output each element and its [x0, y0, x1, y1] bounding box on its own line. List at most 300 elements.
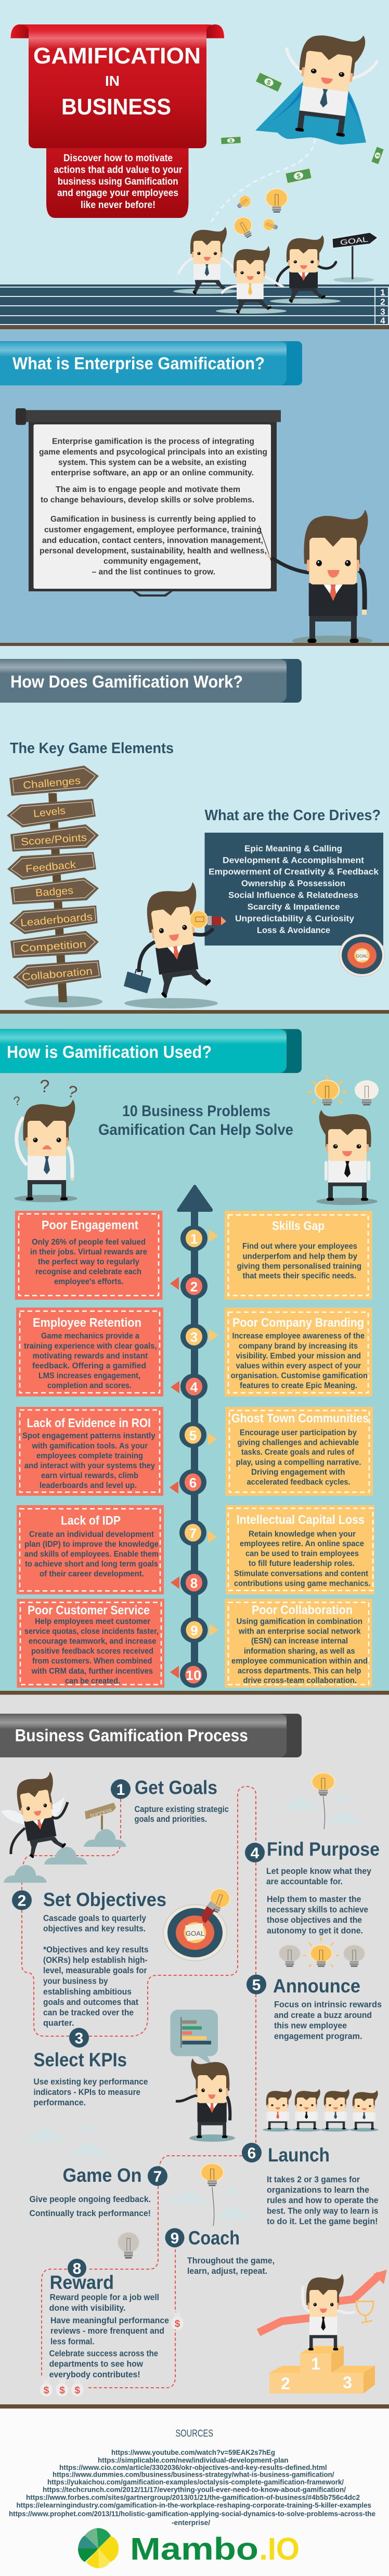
step 5: announce: 5	[252, 1977, 261, 1994]
step 9: coach: Throughout the game,	[187, 2256, 275, 2266]
logo mark	[78, 2528, 119, 2568]
step 3: select kpis: performance.	[33, 2098, 86, 2107]
source list: https://www.youtube.com/watch?v=59EAK2s7hEg	[111, 2448, 275, 2456]
screen text	[39, 437, 267, 577]
step 2: set objectives: quarter.	[43, 2018, 74, 2028]
step 2: set objectives: Set Objectives	[43, 1889, 166, 1910]
step 2: set objectives: can be tracked over the	[43, 2008, 134, 2017]
success sign: SUCCESS	[89, 1808, 113, 1820]
subtitle text: like never before!	[81, 199, 155, 211]
divider band	[0, 2404, 389, 2409]
confused businessman: ?	[12, 1094, 22, 1109]
subtitle text: actions that add value to your	[54, 164, 183, 176]
card: employee retention: Employee Retention	[33, 1316, 141, 1330]
mambo.io logo	[78, 2528, 300, 2568]
goal sign: GOAL	[340, 235, 369, 247]
sign: levels	[7, 799, 96, 827]
step 8: reward: everybody contributes!	[49, 2370, 140, 2379]
card: poor company branding: values within every aspect of your	[236, 1362, 361, 1370]
section header: how does gamification work	[0, 659, 302, 703]
runner B	[222, 246, 283, 314]
sign: competition: Competition	[20, 939, 87, 954]
dashed process path	[22, 1787, 256, 2388]
step 9: coach: learn, adjust, repeat.	[187, 2266, 267, 2276]
step 6: launch	[242, 2143, 379, 2227]
card: poor collaboration	[225, 1599, 372, 1688]
goal sign	[332, 232, 378, 282]
unlit bulb	[118, 2232, 139, 2259]
heading: sources: SOURCES	[176, 2428, 213, 2439]
card: poor customer service: Poor Customer Service	[28, 1603, 150, 1617]
confused businessman: ?	[40, 1077, 49, 1096]
bulb with string	[312, 1773, 335, 1829]
card: poor collaboration: Poor Collaboration	[252, 1603, 353, 1617]
card: intellectual capital loss: Stimulate conversations and content	[234, 1570, 369, 1578]
source list: https://techcrunch.com/2012/11/17/everything-youll-ever-need-to-know-about-gamification/	[43, 2486, 346, 2494]
step 1: get goals: 1	[116, 1781, 125, 1798]
screen text: enterprise software, an app or an online community.	[51, 469, 254, 477]
step 1: get goals: goals and priorities.	[134, 1814, 207, 1824]
signpost	[7, 766, 102, 1007]
core drives box: Loss & Avoidance	[257, 925, 330, 935]
runner C in suit	[277, 235, 336, 303]
step 3: select kpis: indicators - KPIs to measure	[33, 2087, 140, 2097]
podium: 1	[311, 2354, 320, 2373]
step 9: coach: 9	[171, 2230, 179, 2247]
core drives box: Ownership & Possession	[241, 878, 345, 888]
card: ghost town communities: Ghost Town Communities	[231, 1412, 369, 1426]
screen text: and education, contact centers, innovation management,	[42, 536, 263, 545]
step 2: set objectives: (OKRs) help establish high-	[43, 1955, 148, 1965]
card: poor company branding: features to create Epic Meaning.	[240, 1381, 357, 1390]
timeline node 3	[180, 1324, 218, 1350]
section header: how does gamification work: How Does Gamification Work?	[10, 672, 243, 691]
mambo.io logo: .IO	[260, 2532, 300, 2567]
source list: https://www.forbes.com/sites/gartnergroup/2013/01/21/the-gamification-of-business/#4b5b756c4dc2	[26, 2493, 360, 2502]
running track	[0, 284, 389, 329]
step 1: get goals: Get Goals	[135, 1777, 217, 1798]
panel: business gamification process background	[0, 1694, 389, 2404]
target icon	[339, 934, 385, 977]
dashed flight path	[211, 139, 315, 224]
step 4: find purpose: autonomy to get it done.	[267, 1925, 363, 1936]
card: employee retention: training experience with clear goals,	[24, 1342, 157, 1351]
panel: what is enterprise gamification background	[0, 329, 389, 643]
step 8: reward: Reward people for a job well	[50, 2293, 159, 2302]
step 2: set objectives: *Objectives and key results	[43, 1945, 149, 1954]
step 8: reward: Celebrate success across the	[49, 2349, 158, 2359]
step 2: set objectives: goals and outcomes that	[43, 1997, 138, 2007]
money bags	[40, 2310, 184, 2397]
timeline node 3: 3	[190, 1329, 198, 1345]
card: lack of idp: Create an individual development	[29, 1530, 154, 1539]
goal target with pencil and bulb: GOAL	[186, 1930, 204, 1937]
step 3: select kpis: Select KPIs	[33, 2049, 127, 2070]
card: employee retention: Game mechanics provide a	[41, 1331, 139, 1341]
target icon: GOAL	[356, 954, 368, 959]
panel: hero background	[0, 0, 389, 329]
step 8: reward: less formal.	[50, 2337, 95, 2347]
timeline node 9: 9	[190, 1623, 198, 1638]
runner shadows	[173, 289, 341, 314]
card: poor company branding: visibility. Embed your mission and	[236, 1352, 361, 1361]
timeline arrow	[177, 1185, 213, 1664]
subtitle text: Discover how to motivate	[63, 152, 173, 164]
timeline node 1: 1	[190, 1231, 198, 1247]
step 8: reward: 8	[73, 2260, 81, 2277]
presenter businessman	[259, 510, 372, 646]
screen text: system. This system can be a website, an existing	[58, 458, 247, 467]
section header: business gamification process: Business Gamification Process	[15, 1726, 248, 1745]
card: skills gap: giving them personalised training	[237, 1262, 361, 1271]
step 3: select kpis	[33, 2028, 148, 2107]
panel: sources background	[0, 2409, 389, 2576]
section header: how is gamification used	[0, 1029, 302, 1073]
core drives box: Scarcity & Impatience	[248, 902, 340, 912]
card: ghost town communities: accelerated feedback cycles.	[247, 1478, 351, 1486]
sign: challenges	[9, 766, 99, 796]
screen text: community engagement,	[103, 557, 201, 566]
card: skills gap: underperfom and help them by	[242, 1252, 357, 1261]
running track: 3	[380, 307, 385, 317]
step 1: get goals: Capture existing strategic	[134, 1804, 229, 1814]
card: lack of evidence in roi: leaderboards and level up.	[40, 1481, 137, 1490]
step 6: launch: best. The only way to learn is	[267, 2206, 379, 2216]
timeline node 7	[179, 1520, 217, 1546]
card: lack of evidence in roi: Spot engagement patterns instantly	[22, 1432, 155, 1441]
core drives box: Unpredictability & Curiosity	[235, 913, 355, 924]
team of four businessmen	[263, 2089, 379, 2131]
source list: https://simplicable.com/new/individual-development-plan	[98, 2456, 288, 2464]
step 8: reward: Reward	[50, 2272, 114, 2293]
card: lack of idp: and skills of employees. Enable them	[24, 1550, 159, 1559]
card: lack of evidence in roi: employees complete training	[36, 1452, 143, 1460]
timeline node 6	[170, 1469, 206, 1495]
step 2: set objectives: Cascade goals to quarterly	[43, 1913, 146, 1923]
step 7: game on: Continually track performance!	[29, 2208, 151, 2218]
card: lack of idp: to achieve short and long term goals	[25, 1560, 158, 1569]
card: lack of idp: Lack of IDP	[61, 1514, 121, 1528]
sign: leaderboards: Leaderboards	[20, 911, 93, 929]
money bills	[221, 72, 384, 184]
card: poor customer service: with CRM data, further incentives	[31, 1667, 153, 1676]
screen text: customer engagement, employee performance, training	[44, 525, 262, 535]
sign: feedback: Feedback	[25, 859, 77, 875]
step 6: launch: rules and how to operate the	[267, 2195, 379, 2205]
timeline node 2: 2	[190, 1279, 198, 1295]
superhero businessman	[255, 28, 377, 145]
step 8: reward	[49, 2259, 169, 2379]
stepping clouds	[4, 1829, 126, 1883]
card: skills gap: Skills Gap	[272, 1219, 325, 1233]
winged businessman	[1, 1771, 68, 1859]
running track: 1	[380, 288, 385, 297]
divider band	[0, 1010, 389, 1014]
step 2: set objectives: establishing ambitious	[43, 1987, 132, 1997]
running track: 2	[380, 297, 385, 307]
card: ghost town communities	[226, 1407, 373, 1496]
card: skills gap	[225, 1211, 372, 1300]
step 6: launch: organizations to learn the	[267, 2185, 369, 2195]
core drives box: Social Influence & Relatedness	[228, 890, 358, 900]
panel: how is gamification used background	[0, 1014, 389, 1691]
sign: levels: Levels	[33, 805, 66, 820]
step 1: get goals	[111, 1777, 229, 1824]
card: skills gap: that meets their specific needs.	[242, 1272, 356, 1280]
podium	[269, 2346, 375, 2393]
card: lack of idp: plan (IDP) to improve the knowledge	[24, 1540, 159, 1549]
podium: 3	[343, 2373, 352, 2392]
rising arrow	[258, 2270, 387, 2333]
card: employee retention: completion and scores.	[47, 1381, 132, 1390]
section header: how is gamification used: How is Gamification Used?	[7, 1042, 212, 1062]
sign: challenges: Challenges	[22, 775, 81, 792]
source list: -enterprise/	[172, 2518, 210, 2527]
step 5: announce: engagement program.	[274, 2031, 362, 2041]
card: ghost town communities: Encourage user participation by	[240, 1428, 357, 1438]
card: poor engagement: in their jobs. Virtual rewards are	[30, 1248, 147, 1257]
card: ghost town communities: giving challenges and achievable	[237, 1439, 359, 1447]
card: poor company branding: organisation. Customise gamification	[231, 1371, 368, 1380]
screen text: game elements and psycological principals into an existing	[39, 448, 267, 457]
step 4: find purpose: Help them to master the	[267, 1894, 361, 1904]
card: poor engagement: Poor Engagement	[42, 1218, 138, 1232]
card: poor collaboration: with an enterprise social network	[238, 1627, 361, 1636]
step 3: select kpis: 3	[75, 2030, 83, 2047]
core drives box: Empowerment of Creativity & Feedback	[209, 866, 379, 877]
card: skills gap: Find out where your employees	[242, 1242, 357, 1251]
heading: what are the core drives: What are the Core Drives?	[205, 807, 381, 824]
timeline node 9	[181, 1617, 218, 1643]
screen text: Enterprise gamification is the process of integrating	[52, 437, 254, 446]
step 7: game on: 7	[153, 2168, 162, 2185]
card: ghost town communities: tasks. Create goals and rules of	[241, 1448, 355, 1457]
card: lack of evidence in roi: and interact with your systems they	[24, 1461, 155, 1470]
card: lack of evidence in roi: Lack of Evidence in ROI	[27, 1416, 151, 1430]
card: employee retention: feedback. Offering a gamified	[32, 1362, 146, 1370]
screen text: Gamification in business is currently being applied to	[50, 515, 256, 524]
card: poor engagement: recognise and celebrate each	[35, 1267, 141, 1276]
subtitle text: and engage your employees	[57, 187, 178, 199]
sign: badges: Badges	[35, 885, 74, 899]
happy businessman with bulbs	[308, 1076, 379, 1205]
card: employee retention: LMS increases engagement,	[38, 1371, 140, 1380]
timeline node 4: 4	[190, 1379, 198, 1395]
mambo.io logo: Mambo	[130, 2532, 258, 2567]
card: intellectual capital loss: employees retire. An online space	[240, 1539, 364, 1548]
step 8: reward: done with visibility.	[49, 2303, 125, 2313]
step 5: announce: Announce	[273, 1975, 360, 1997]
step 6: launch: 6	[248, 2145, 256, 2162]
businessman running with bulb and pencil	[124, 882, 226, 1008]
card: poor company branding: Increase employee awareness of the	[232, 1331, 365, 1341]
card: poor company branding	[225, 1308, 372, 1396]
step 7: game on	[29, 2165, 167, 2218]
card: poor customer service: from customers. When combined	[32, 1657, 152, 1665]
running track: 4	[380, 316, 385, 326]
timeline node 7: 7	[189, 1525, 197, 1541]
heading: 10 business problems: 10 Business Problems	[122, 1103, 270, 1120]
section header: what is enterprise gamification: What is Enterprise Gamification?	[12, 354, 265, 373]
step 9: coach: Coach	[188, 2228, 240, 2249]
step 8: reward: Have meaningful performance	[50, 2315, 169, 2325]
card: poor customer service	[17, 1599, 164, 1688]
step 5: announce: and create a buzz around	[274, 2010, 372, 2020]
source list: https://elearningindustry.com/gamification-in-the-workplace-reshaping-corporate-training-5-killer-examples	[17, 2501, 371, 2509]
step 3: select kpis: Use existing key performance	[33, 2077, 148, 2087]
bulb with string	[201, 2164, 224, 2226]
timeline node 5: 5	[189, 1428, 197, 1443]
card: poor engagement: Only 26% of people feel valued	[32, 1238, 146, 1247]
sign: badges	[10, 878, 99, 904]
sign: score/points	[10, 824, 99, 852]
section header: business gamification process	[0, 1714, 302, 1757]
screen text: – and the list continues to grow.	[92, 568, 215, 577]
card: ghost town communities: Driving engagement with	[251, 1468, 345, 1477]
sign: leaderboards	[9, 905, 98, 934]
card: lack of idp	[17, 1505, 164, 1595]
card: poor customer service: service quotas, close incidents faster,	[24, 1627, 159, 1636]
card: lack of evidence in roi: with gamification tools. As your	[32, 1442, 148, 1451]
step 2: set objectives: objectives and key results.	[43, 1923, 146, 1934]
podium: 2	[281, 2374, 290, 2393]
card: poor customer service: positive feedback scores received	[31, 1647, 153, 1656]
speech bubble with bar chart	[171, 2010, 218, 2066]
bulbs row	[279, 1937, 365, 1967]
kpi businessman	[176, 2059, 235, 2142]
step 4: find purpose: 4	[251, 1845, 260, 1862]
step 2: set objectives: your business by	[43, 1976, 108, 1986]
card: poor collaboration: across departments. This can help	[238, 1666, 361, 1676]
card: ghost town communities: play, using a compelling narrative.	[236, 1458, 361, 1467]
title text	[33, 43, 201, 120]
section header: what is enterprise gamification	[0, 341, 302, 385]
step 6: launch: to do it. Let the game begin!	[267, 2217, 378, 2227]
source list: https://www.dummies.com/business/business-strategy/what-is-business-gamification/	[53, 2470, 334, 2479]
core drives box: Epic Meaning & Calling	[244, 844, 342, 853]
step 2: set objectives: level, measurable goals for	[43, 1965, 147, 1975]
card: poor customer service: Help employees meet customer	[35, 1617, 150, 1626]
card: poor company branding: company brand by increasing its	[239, 1342, 358, 1351]
success sign	[85, 1803, 116, 1830]
source list	[9, 2448, 375, 2527]
source list: https://www.cio.com/article/3302036/okr-objectives-and-key-results-defined.html	[59, 2463, 327, 2471]
step 6: launch: It takes 2 or 3 games for	[267, 2174, 360, 2184]
timeline node 10: 10	[186, 1667, 201, 1683]
card: poor collaboration: (ESN) can increase internal	[251, 1637, 348, 1646]
core drives box: Development & Accomplishment	[223, 855, 364, 865]
timeline node 8: 8	[190, 1575, 198, 1591]
timeline node 4	[171, 1374, 208, 1400]
step 2: set objectives	[12, 1889, 166, 2028]
timeline node 10	[170, 1662, 207, 1688]
timeline node 8	[171, 1570, 208, 1596]
step 9: coach	[165, 2228, 275, 2276]
step 6: launch: Launch	[268, 2144, 330, 2166]
step 4: find purpose: are accountable for.	[266, 1876, 343, 1886]
screen text: to change behaviours, develop skills or solve problems.	[41, 496, 254, 504]
core drives box	[205, 833, 383, 946]
step 7: game on: Game On	[62, 2165, 141, 2186]
light bulbs	[231, 189, 288, 241]
card: poor engagement: the perfect way to regularly	[38, 1258, 139, 1266]
title ribbon	[10, 24, 224, 218]
card: intellectual capital loss: Retain knowledge when your	[249, 1530, 356, 1538]
step 4: find purpose: Let people know what they	[266, 1866, 371, 1876]
screen text: personal development, sustainability, health and wellness,	[40, 547, 267, 555]
card: poor collaboration: information sharing, as well as	[244, 1647, 355, 1656]
card: lack of evidence in roi	[16, 1407, 163, 1496]
card: intellectual capital loss	[226, 1505, 374, 1595]
confused businessman: ?	[66, 1081, 80, 1102]
divider band	[0, 643, 389, 646]
step 4: find purpose: those objectives and the	[267, 1915, 362, 1925]
card: poor engagement: employee's efforts.	[54, 1277, 124, 1286]
panel: how does gamification work background	[0, 646, 389, 1010]
card: poor customer service: encourage teamwork, and increase	[29, 1637, 157, 1646]
card: lack of idp: of their career development.	[40, 1570, 144, 1578]
card: intellectual capital loss: can be used to train employees	[245, 1549, 359, 1558]
runner A	[178, 227, 233, 295]
title text: BUSINESS	[61, 94, 171, 120]
step 8: reward: reviews - more frenquent and	[50, 2326, 164, 2336]
step 4: find purpose: necessary skills to achieve	[267, 1905, 368, 1914]
screen text: The aim is to engage people and motivate them	[56, 485, 240, 494]
subtitle text: business using Gamification	[58, 176, 178, 187]
timeline node 5	[179, 1422, 217, 1448]
source list: https://www.prophet.com/2013/11/holistic-gamification-applying-social-dynamics-to-solve-problems-across-the	[9, 2509, 375, 2518]
heading: 10 business problems: Gamification Can Help Solve	[98, 1121, 293, 1138]
card: intellectual capital loss: Intellectual Capital Loss	[237, 1513, 365, 1527]
timeline node 6: 6	[189, 1475, 197, 1491]
clouds	[25, 1795, 362, 2219]
card: intellectual capital loss: contributions using game mechanics.	[234, 1579, 371, 1588]
divider band	[0, 1691, 389, 1694]
step 2: set objectives: 2	[18, 1893, 26, 1910]
card: lack of evidence in roi: earn virtual rewards, climb	[41, 1471, 138, 1480]
card: poor collaboration: Using gamification in combination	[237, 1617, 362, 1626]
card: employee retention	[16, 1308, 163, 1396]
step 4: find purpose: Find Purpose	[267, 1839, 380, 1860]
sign: feedback	[7, 852, 96, 880]
title text: IN	[105, 73, 120, 89]
step 4: find purpose	[245, 1839, 380, 1936]
source list: https://yukaichou.com/gamification-examples/octalysis-complete-gamification-framework/	[47, 2478, 344, 2486]
timeline node 1	[180, 1225, 218, 1251]
goal target with pencil and bulb	[163, 1886, 232, 1961]
winning businessman with trophy	[303, 2274, 373, 2350]
projector screen	[16, 408, 281, 597]
step 5: announce	[247, 1975, 382, 2041]
subtitle text	[54, 152, 183, 211]
sign: competition	[10, 931, 99, 958]
sign: score/points: Score/Points	[20, 832, 87, 848]
card: poor collaboration: employee communication within and	[231, 1657, 368, 1665]
step 7: game on: Give people ongoing feedback.	[29, 2194, 151, 2204]
step 5: announce: Focus on intrinsic rewards	[274, 2000, 382, 2010]
card: employee retention: motivating rewards and instant	[32, 1352, 148, 1361]
card: intellectual capital loss: to fill future leadership roles.	[249, 1559, 355, 1568]
step 5: announce: this new employee	[274, 2021, 347, 2030]
timeline node 2	[170, 1273, 208, 1299]
sign: collaboration: Collaboration	[21, 966, 93, 983]
card: poor customer service: can be created.	[65, 1677, 120, 1686]
card: poor company branding: Poor Company Branding	[232, 1316, 364, 1330]
confused businessman	[12, 1077, 80, 1202]
heading: 10 business problems	[98, 1103, 293, 1138]
card: poor engagement	[15, 1211, 162, 1300]
card: poor collaboration: drive cross-team collaboration.	[243, 1676, 357, 1685]
